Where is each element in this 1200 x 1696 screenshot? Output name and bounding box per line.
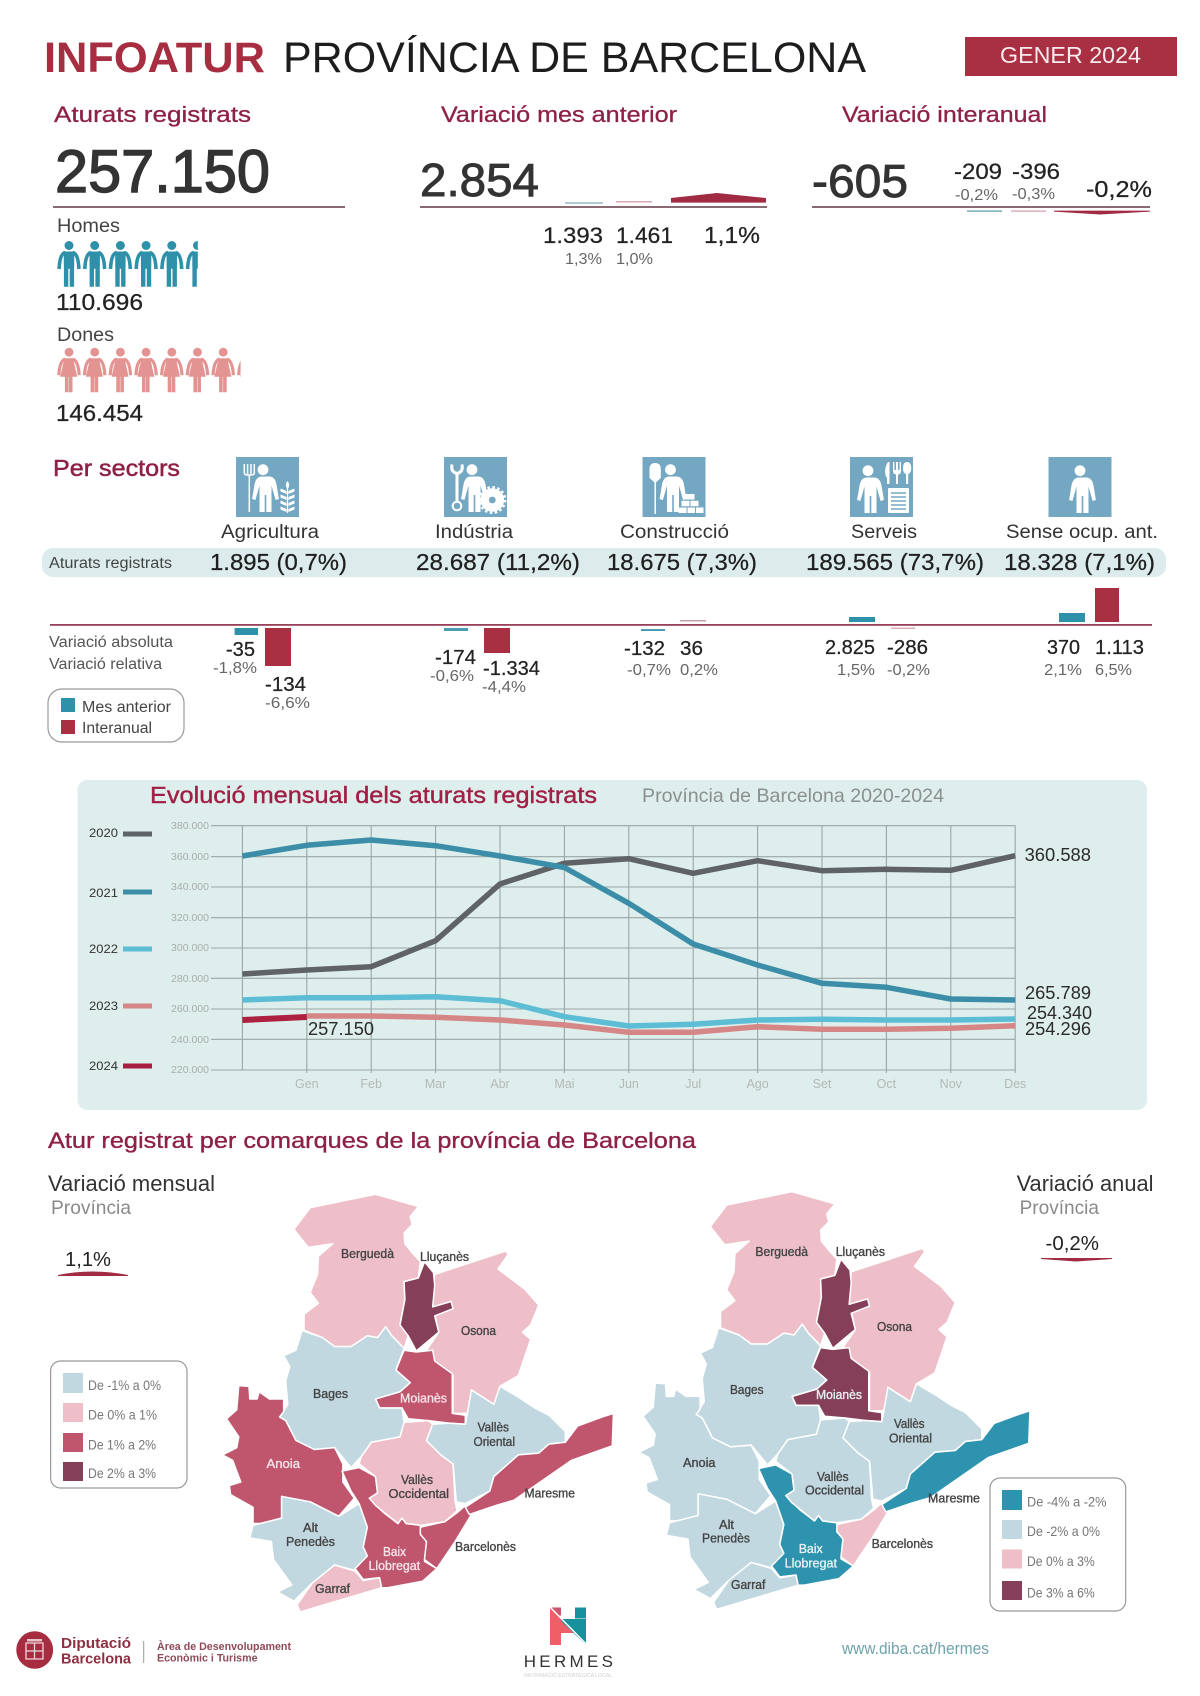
y axis labels — [171, 821, 209, 1076]
legend: mes anterior / interanual: Interanual — [82, 720, 152, 737]
variation values: -0,2% — [887, 662, 930, 679]
map labels: Oriental — [474, 1435, 515, 1449]
icon: H mark — [550, 1607, 587, 1645]
map labels: Barcelonès — [455, 1540, 516, 1554]
logo: Diputació de Barcelona — [16, 1631, 291, 1669]
x axis labels: Des — [1004, 1077, 1026, 1091]
panel: per sectors — [42, 455, 1166, 742]
series legend: 2022 — [89, 942, 118, 956]
icon row: women — [59, 348, 259, 392]
x axis labels: Mar — [425, 1077, 446, 1091]
map labels: Oriental — [889, 1432, 932, 1446]
strip: aturats registrats per sector — [42, 548, 1166, 577]
legend: mes anterior / interanual: Mes anterior — [82, 699, 171, 716]
sector names: Agricultura — [221, 522, 319, 543]
end values — [308, 844, 1092, 1039]
map labels: Bages — [313, 1387, 348, 1401]
panel: variació mensual summary: Província — [51, 1197, 131, 1219]
map labels: Osona — [461, 1324, 496, 1338]
map labels: Alt — [719, 1518, 735, 1532]
website url: www.diba.cat/hermes — [841, 1639, 989, 1658]
icon: seal — [16, 1631, 53, 1669]
legend: variació mensual: De -1% a 0% — [88, 1377, 161, 1393]
panel: variació mensual summary: 1,1% — [65, 1249, 111, 1271]
line series: 2022 — [242, 997, 1015, 1026]
y axis labels: 280.000 — [171, 974, 209, 985]
logo: Hermes — [524, 1607, 613, 1679]
x axis labels: Ago — [746, 1077, 769, 1091]
variation values: -4,4% — [482, 679, 526, 696]
x axis labels — [295, 1077, 1026, 1091]
x axis labels: Jun — [619, 1077, 639, 1091]
strip: aturats registrats per sector: 1.895 (0,7%) — [210, 549, 347, 575]
y axis labels: 300.000 — [171, 943, 209, 954]
row labels: Variació absoluta — [49, 634, 173, 651]
sector names: Indústria — [435, 522, 513, 543]
panel: aturats registrats — [53, 102, 345, 426]
map labels — [266, 1247, 575, 1596]
mini bars — [565, 193, 766, 204]
line series: 2021 — [242, 840, 1015, 1000]
legend: variació mensual: De 1% a 2% — [88, 1436, 156, 1452]
logo: Diputació de Barcelona: Barcelona — [61, 1651, 132, 1668]
variation values: 2.825 — [825, 637, 875, 659]
bar chart: variació per sector — [50, 588, 1152, 666]
map labels: Occidental — [388, 1487, 449, 1501]
series legend — [89, 826, 152, 1073]
variation values: -1.334 — [483, 658, 540, 680]
y axis labels: 340.000 — [171, 882, 209, 893]
women block: 146.454 — [56, 400, 143, 426]
map labels: Osona — [877, 1320, 912, 1334]
men block — [57, 218, 198, 310]
x axis labels: Gen — [295, 1077, 319, 1091]
y axis labels: 240.000 — [171, 1035, 209, 1046]
breakdown values — [543, 222, 760, 268]
icon row: men — [59, 241, 207, 287]
icon: indústria — [444, 457, 507, 517]
series legend: 2021 — [89, 886, 118, 900]
logo: Diputació de Barcelona: Diputació — [61, 1635, 131, 1652]
end values: 254.296 — [1025, 1018, 1091, 1039]
map labels: Anoia — [266, 1457, 300, 1471]
title: PROVÍNCIA DE BARCELONA — [283, 34, 866, 82]
strip: aturats registrats per sector: 28.687 (11,2%) — [416, 549, 580, 575]
breakdown values — [954, 159, 1152, 204]
logo: Hermes: INFORMACIÓ ESTRATÈGICA LOCAL — [524, 1672, 612, 1679]
end values: 257.150 — [308, 1018, 374, 1039]
strip: aturats registrats per sector: 18.328 (7,1%) — [1004, 549, 1155, 575]
x axis labels: Abr — [490, 1077, 510, 1091]
end values: 254.340 — [1027, 1002, 1092, 1023]
panel: variació mensual summary: Variació mensual — [48, 1171, 215, 1196]
map labels: Vallès — [817, 1470, 849, 1484]
heading: variació interanual: Variació interanual — [842, 102, 1047, 127]
chart heading: Evolució mensual dels aturats registrats — [150, 782, 597, 808]
heading: comarques: Atur registrat per comarques de la província de Barcelona — [48, 1128, 697, 1153]
map labels: Llobregat — [785, 1556, 838, 1570]
sector names — [221, 522, 1158, 543]
variation values: 2,1% — [1044, 662, 1082, 679]
map labels: Anoia — [683, 1456, 716, 1470]
panel: variació mes anterior — [420, 102, 767, 268]
variation values: 1.113 — [1095, 637, 1144, 659]
map labels: Garraf — [731, 1578, 766, 1592]
variation values: 0,2% — [680, 662, 718, 679]
legend: variació anual: De 3% a 6% — [1027, 1584, 1095, 1600]
row labels — [49, 634, 173, 673]
breakdown values: 1,0% — [616, 251, 653, 268]
breakdown values: 1,1% — [704, 222, 760, 248]
chart subheading: Província de Barcelona 2020-2024 — [642, 785, 944, 807]
breakdown values: -0,2% — [1086, 176, 1152, 202]
strip: aturats registrats per sector: 189.565 (73,7%) — [806, 549, 984, 575]
breakdown values: -396 — [1012, 159, 1060, 184]
breakdown values: 1,3% — [565, 251, 602, 268]
legend: variació anual — [990, 1478, 1126, 1611]
series legend: 2020 — [89, 826, 118, 840]
map labels: Moianès — [400, 1392, 447, 1406]
map labels: Alt — [303, 1521, 319, 1535]
end values: 360.588 — [1025, 844, 1091, 865]
date badge: GENER 2024 — [1000, 42, 1141, 68]
legend: variació mensual: De 2% a 3% — [88, 1465, 156, 1481]
row labels: Variació relativa — [49, 656, 162, 673]
variation values: -0,7% — [627, 662, 671, 679]
breakdown values: 1.393 — [543, 223, 603, 248]
heading: aturats registrats: Aturats registrats — [54, 102, 251, 127]
map labels — [683, 1245, 980, 1592]
heading: variació mes anterior: Variació mes anterior — [441, 102, 677, 127]
line series: 2020 — [242, 856, 1015, 974]
map labels: Llobregat — [368, 1559, 421, 1573]
strip: aturats registrats per sector: Aturats registrats — [49, 555, 172, 572]
panel: evolució mensual — [78, 780, 1147, 1110]
value: -605 — [812, 155, 908, 207]
variation values: 370 — [1047, 637, 1080, 659]
panel: variació anual summary: Província — [1020, 1197, 1099, 1219]
x axis labels: Jul — [685, 1077, 701, 1091]
map labels: Baix — [383, 1545, 407, 1559]
map labels: Maresme — [524, 1486, 575, 1500]
variation values: 36 — [680, 638, 703, 660]
legend: variació anual: De 0% a 3% — [1027, 1553, 1095, 1569]
x axis labels: Oct — [877, 1077, 897, 1091]
series legend: 2023 — [89, 999, 118, 1013]
breakdown values: -0,3% — [1012, 186, 1055, 203]
map labels: Vallès — [401, 1473, 433, 1487]
x axis labels: Set — [813, 1077, 832, 1091]
legend: variació anual: De -4% a -2% — [1027, 1494, 1106, 1510]
y axis labels: 220.000 — [171, 1065, 209, 1076]
map labels: Bages — [730, 1383, 764, 1397]
total value: 257.150 — [55, 138, 270, 205]
value: 2.854 — [420, 154, 539, 206]
sector names: Serveis — [851, 522, 917, 543]
icon: agricultura — [236, 457, 299, 517]
variation values: 1,5% — [837, 662, 875, 679]
series legend: 2024 — [89, 1059, 118, 1073]
panel: variació mensual summary — [48, 1171, 215, 1276]
legend: variació mensual: De 0% a 1% — [88, 1406, 157, 1422]
breakdown values: -0,2% — [955, 187, 998, 204]
y axis labels: 380.000 — [171, 821, 209, 832]
title: INFOATUR — [44, 34, 265, 82]
map labels: Berguedà — [755, 1245, 808, 1259]
variation values: 6,5% — [1095, 662, 1132, 679]
sector names: Construcció — [620, 522, 729, 543]
y axis labels: 360.000 — [171, 852, 209, 863]
mini bars — [967, 210, 1150, 214]
women block: Dones — [57, 325, 114, 346]
panel: variació anual summary — [1017, 1171, 1154, 1262]
panel: variació anual summary: -0,2% — [1046, 1233, 1099, 1255]
variation values — [213, 637, 1144, 712]
variation values: -6,6% — [265, 695, 310, 712]
women block — [57, 328, 241, 422]
y axis labels: 320.000 — [171, 913, 209, 924]
heading: per sectors: Per sectors — [53, 455, 180, 481]
map labels: Maresme — [928, 1492, 980, 1506]
variation values: -35 — [226, 639, 255, 661]
legend: variació anual: De -2% a 0% — [1027, 1523, 1100, 1539]
variation values: -1,8% — [213, 660, 257, 677]
icon: construcció — [642, 457, 706, 517]
map labels: Occidental — [805, 1484, 864, 1498]
logo: Diputació de Barcelona: Àrea de Desenvolupament — [157, 1640, 291, 1653]
x axis labels: Feb — [360, 1077, 382, 1091]
x axis labels: Nov — [940, 1077, 963, 1091]
line series: 2023 — [307, 1016, 1015, 1032]
map labels: Berguedà — [341, 1247, 394, 1261]
end values: 265.789 — [1025, 982, 1091, 1003]
variation values: -286 — [887, 637, 928, 659]
x axis labels: Mai — [554, 1077, 574, 1091]
map labels: Vallès — [894, 1417, 924, 1431]
logo: Diputació de Barcelona: Econòmic i Turisme — [157, 1652, 258, 1664]
grid lines — [211, 826, 1016, 1073]
sector names: Sense ocup. ant. — [1006, 522, 1158, 543]
logo: Hermes: HERMES — [524, 1652, 613, 1671]
strip: aturats registrats per sector: 18.675 (7,3%) — [607, 549, 757, 575]
icon: serveis — [850, 457, 913, 517]
date badge — [965, 37, 1177, 76]
map labels: Vallès — [478, 1420, 509, 1434]
variation values: -134 — [265, 674, 306, 696]
variation values: -0,6% — [430, 668, 474, 685]
legend: mes anterior / interanual — [48, 689, 184, 742]
map: variació anual — [639, 1192, 1030, 1609]
map labels: Lluçanès — [420, 1250, 469, 1264]
men block: Homes — [57, 216, 120, 237]
legend: variació mensual — [51, 1361, 187, 1488]
map labels: Garraf — [315, 1582, 351, 1596]
map labels: Moianès — [816, 1388, 862, 1402]
map: variació mensual — [222, 1194, 613, 1612]
men block: 110.696 — [56, 289, 143, 315]
y axis labels: 260.000 — [171, 1004, 209, 1015]
map labels: Baix — [799, 1542, 823, 1556]
line series: 2024 — [242, 1017, 307, 1020]
icon: sense ocupació anterior — [1048, 457, 1112, 517]
breakdown values: -209 — [954, 159, 1002, 184]
map labels: Barcelonès — [872, 1537, 933, 1551]
variation values: -132 — [624, 638, 665, 660]
map labels: Penedès — [286, 1535, 335, 1549]
map labels: Lluçanès — [836, 1245, 885, 1259]
breakdown values: 1.461 — [616, 223, 673, 248]
panel: variació anual summary: Variació anual — [1017, 1171, 1154, 1196]
panel: variació interanual — [812, 102, 1152, 214]
map labels: Penedès — [702, 1532, 750, 1546]
variation values: -174 — [435, 647, 476, 669]
